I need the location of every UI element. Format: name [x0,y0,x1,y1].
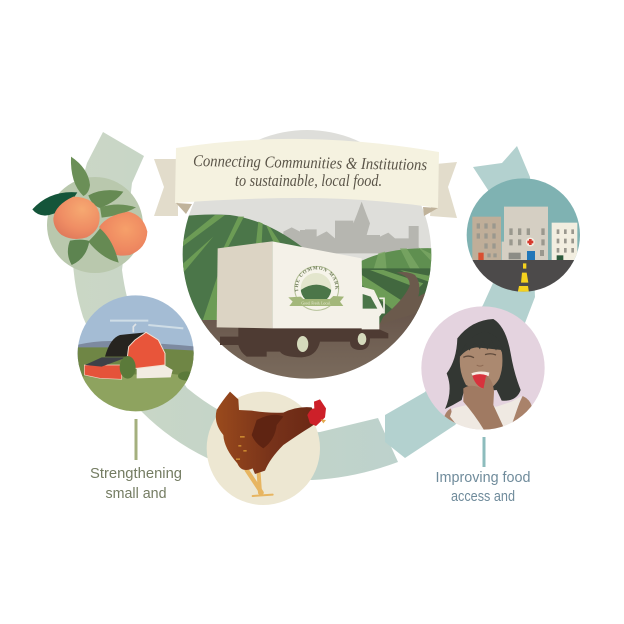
cab [362,287,384,329]
chicken circle [207,392,320,505]
banner ribbon [175,139,439,208]
banner right tail [430,162,457,218]
peach left [53,197,100,239]
garage [509,253,521,259]
mouth [471,371,489,376]
icon: city scene [465,177,582,293]
sky [77,293,197,360]
building right [552,223,577,260]
leaf lower right [88,228,119,263]
windows [477,223,574,257]
label line one: Strengthening [90,465,182,482]
infographic [32,130,580,505]
label line three: Improving food [436,469,530,486]
banner text [193,151,427,190]
road line [518,263,529,293]
wheel rear [297,336,308,352]
fringe [459,332,504,357]
face [460,347,502,392]
hospital cross [527,239,533,245]
apple [472,374,488,389]
main illustration: truck in landscape [182,130,432,379]
cab window [363,294,377,309]
truck shadow and chassis [220,327,388,357]
leaf right upper [88,190,123,208]
comb and wattle [307,399,326,426]
wheel front [358,333,366,345]
icon: chicken [207,392,326,505]
leaf lower left [68,240,89,265]
ground [202,314,416,379]
icon: peaches [32,157,147,273]
tree [120,356,136,379]
blue door [527,251,535,260]
wing [252,415,283,448]
icon: girl eating apple [420,305,547,433]
road [472,260,574,292]
banner fold left [176,203,192,214]
barn vane [133,324,136,332]
right fields [362,268,430,326]
leaf dark [32,192,77,216]
body [216,392,318,474]
cargo box side [217,241,272,328]
building left [472,217,501,260]
label: Strengthening small and [90,465,182,502]
hair [445,319,521,409]
banner line one: Connecting Communities & Institutions [193,151,427,174]
scene circle [180,127,437,383]
arrow band: food access [385,146,535,458]
banner fold right [423,207,438,216]
shirt [450,396,522,433]
logo tagline: Good. Fresh. Local. [301,301,331,305]
beak [321,419,326,423]
peach right [99,212,147,256]
label line: food access [482,437,486,467]
label line two: small and [106,485,166,502]
background [420,305,547,432]
mirror [379,298,384,313]
eyes [463,354,496,358]
clouds [110,321,183,328]
hills [77,341,197,367]
hospital sign [526,238,535,246]
icon: barn scene [77,293,197,413]
city skyline [283,202,419,253]
shoulder left [443,408,455,423]
peach circle [47,177,143,273]
logo [288,266,344,311]
nose [477,365,483,366]
logo name: THE COMMON MARKET [294,266,339,292]
right hill [362,248,432,276]
banner [154,139,457,218]
hand [463,376,503,432]
road [380,272,426,336]
mottles [236,436,247,460]
cargo box front [272,241,363,328]
barn wing roof [85,357,127,367]
shoulder right [512,396,532,423]
building centre [502,207,548,260]
barn body [127,332,165,368]
left hill [180,214,302,333]
arrow band: farm to table [72,132,398,480]
label line: farmers [134,419,138,460]
barn wing red [84,365,122,379]
logo ribbon [288,296,344,306]
barn roof [105,332,146,357]
leaf right [100,204,136,218]
label line four: access and [451,488,515,505]
banner left tail [154,159,178,216]
ground [82,374,189,412]
leaf top [71,157,90,196]
far bush [178,372,190,381]
green door [557,255,563,260]
sky [465,177,582,263]
truck [216,241,388,358]
red door [478,253,484,260]
banner line two: to sustainable, local food. [235,171,382,190]
barn wing white [136,366,173,378]
label: Improving food access and [436,469,530,505]
legs [247,470,273,496]
